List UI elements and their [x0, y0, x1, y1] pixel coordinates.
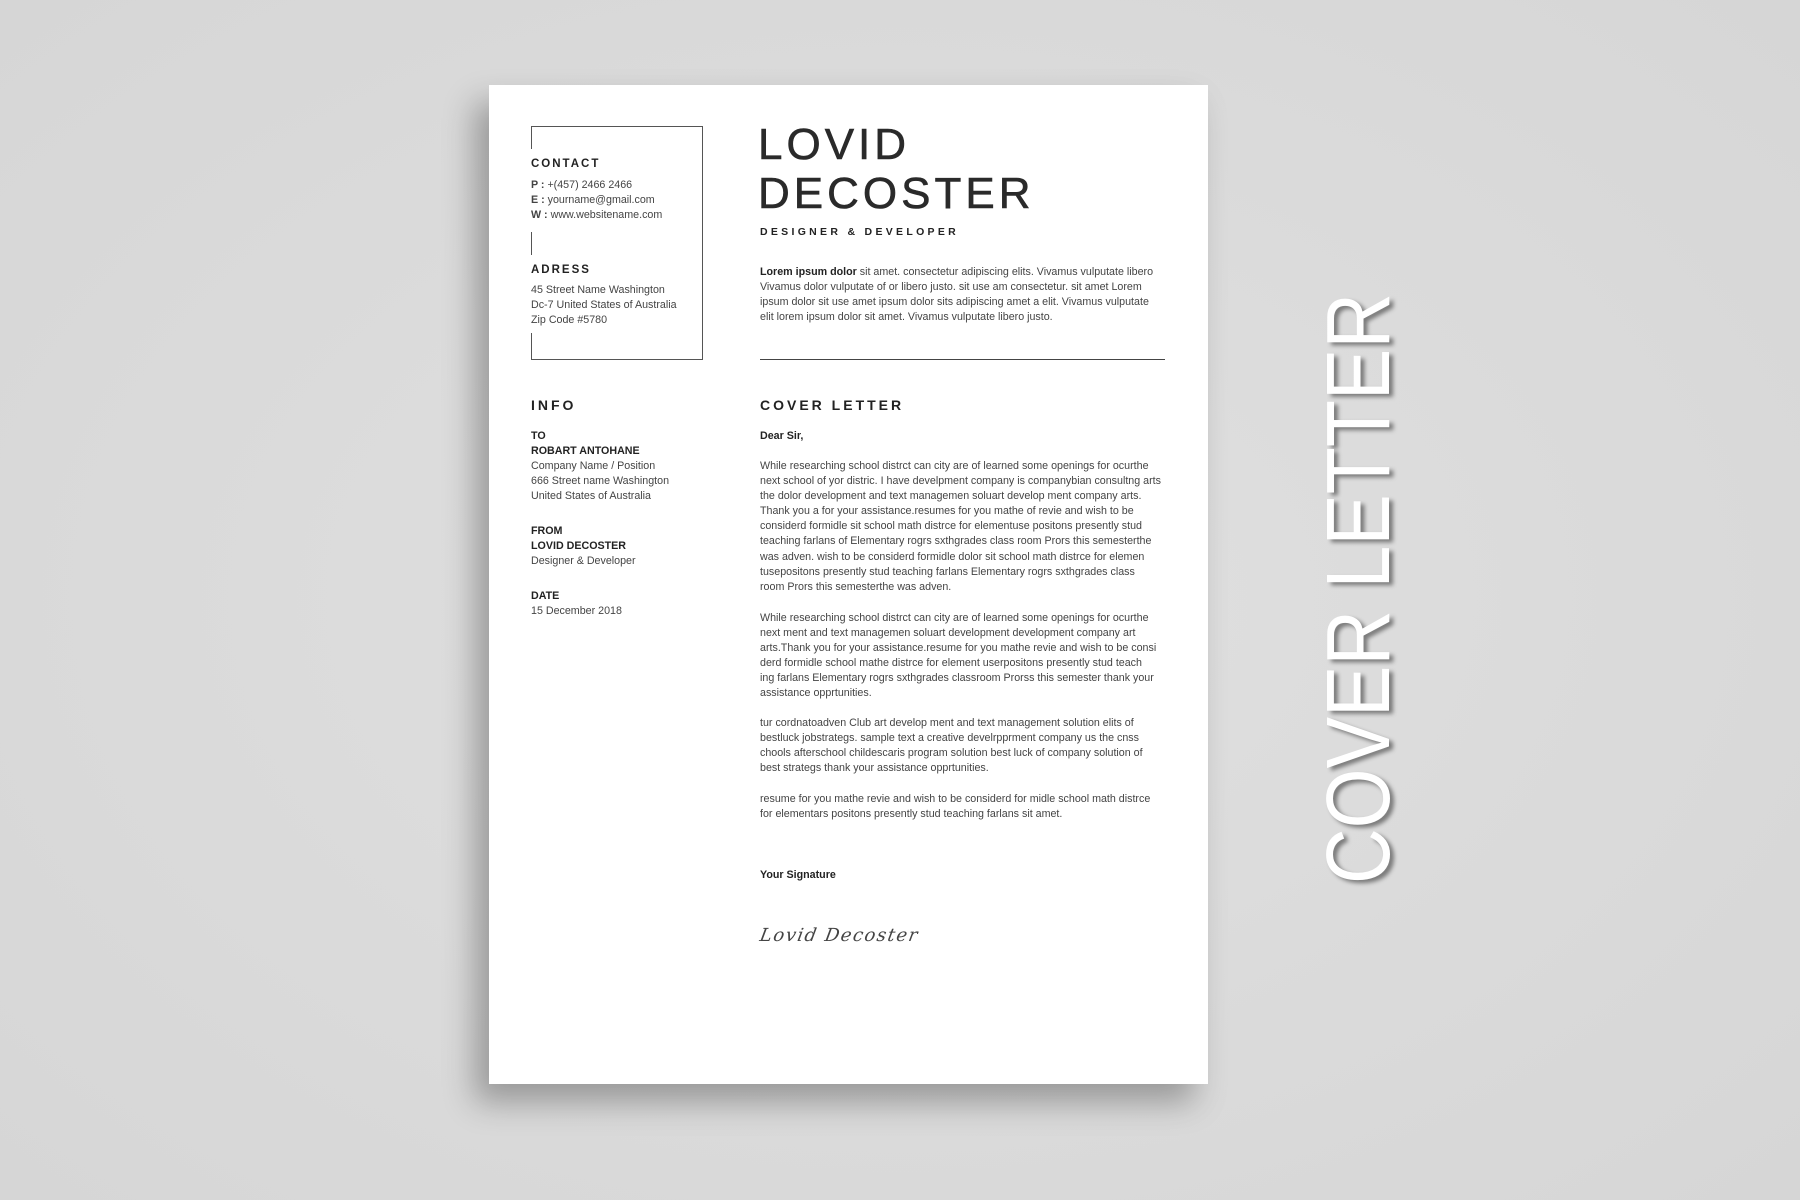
from block: LOVID DECOSTER: [531, 540, 626, 552]
name title: [758, 120, 1034, 218]
contact heading: CONTACT: [531, 158, 600, 170]
from block: [531, 525, 636, 567]
info details: [531, 430, 669, 617]
paragraph 3: tur cordnatoadven Club art develop ment and text management solution elits of: [760, 717, 1134, 729]
paragraph 2: While researching school distrct can city are of learned some openings for ocurthe: [760, 612, 1149, 624]
to block: ROBART ANTOHANE: [531, 445, 640, 457]
intro paragraph: elit lorem ipsum dolor sit amet. Vivamus vulputate libero justo.: [760, 311, 1053, 323]
paragraph 1: was adven. wish to be considerd formidle dolor sit school math distrce for elemen: [760, 551, 1144, 563]
paper: [489, 85, 1208, 1084]
paragraph 2: ing farlans Elementary rogrs sxthgrades classroom Prorss this semester thank your: [760, 672, 1154, 684]
letter body: [760, 430, 1161, 881]
paragraph 1: [760, 460, 1161, 593]
name title: LOVID: [758, 120, 910, 169]
contact details: E : yourname@gmail.com: [531, 194, 655, 206]
greeting: Dear Sir,: [760, 430, 803, 442]
to block: United States of Australia: [531, 490, 651, 502]
date block: 15 December 2018: [531, 605, 622, 617]
contact box: [531, 126, 703, 360]
paragraph 2: arts.Thank you for your assistance.resume for you mathe revie and wish to be consi: [760, 642, 1156, 654]
vertical title: COVER LETTER: [1309, 293, 1409, 884]
intro paragraph: Lorem ipsum dolor sit amet. consectetur adipiscing elits. Vivamus vulputate libero: [760, 266, 1153, 278]
paragraph 1: teaching farlans of Elementary rogrs sxthgrades class room Prors this semesterthe: [760, 535, 1151, 547]
paragraph 2: next ment and text managemen soluart development development company art: [760, 627, 1135, 639]
from block: FROM: [531, 525, 562, 537]
date block: DATE: [531, 590, 559, 602]
address details: [531, 284, 677, 326]
to block: 666 Street name Washington: [531, 475, 669, 487]
address details: 45 Street Name Washington: [531, 284, 665, 296]
paragraph 1: next school of yor distric. I have develpment company is companybian consultng arts: [760, 475, 1161, 487]
paragraph 4: resume for you mathe revie and wish to be considerd for midle school math distrce: [760, 793, 1150, 805]
paragraph 1: tusepositons presently stud teaching farlans Elementary rogrs sxthgrades class: [760, 566, 1135, 578]
date block: [531, 590, 622, 617]
paragraph 2: assistance opprtunities.: [760, 687, 872, 699]
divider: [760, 359, 1165, 360]
paragraph 1: Thank you a for your assistance.resumes for you mathe of revie and wish to be: [760, 505, 1134, 517]
signature: Lovid Decoster: [758, 925, 921, 946]
cover letter heading: COVER LETTER: [760, 397, 904, 413]
name title: DECOSTER: [758, 169, 1034, 218]
paragraph 1: room Prors this semesterthe was adven.: [760, 581, 951, 593]
intro paragraph: Vivamus dolor vulputate of or libero justo. sit use am consectetur. sit amet Lorem: [760, 281, 1142, 293]
paragraph 3: chools afterschool childescaris program solution best luck of company solution of: [760, 747, 1143, 759]
paragraph 4: for elementars positons presently stud teaching farlans sit amet.: [760, 808, 1062, 820]
paragraph 1: While researching school distrct can city are of learned some openings for ocurthe: [760, 460, 1149, 472]
intro paragraph: ipsum dolor sit use amet ipsum dolor sits adipiscing amet a elit. Vivamus vulputate: [760, 296, 1149, 308]
from block: Designer & Developer: [531, 555, 636, 567]
address details: Dc-7 United States of Australia: [531, 299, 677, 311]
paragraph 3: bestluck jobstrategs. sample text a creative develrpprment company us the cnss: [760, 732, 1139, 744]
to block: [531, 430, 669, 502]
paragraph 2: derd formidle school mathe distrce for element userpositons presently stud teach: [760, 657, 1142, 669]
paragraph 1: considerd formidle sit school math distrce for elementuse positons presently stud: [760, 520, 1142, 532]
to block: Company Name / Position: [531, 460, 655, 472]
paragraph 4: [760, 793, 1150, 820]
intro paragraph: [760, 266, 1153, 323]
contact details: P : +(457) 2466 2466: [531, 179, 632, 191]
address details: Zip Code #5780: [531, 314, 607, 326]
contact details: W : www.websitename.com: [531, 209, 662, 221]
paragraph 3: [760, 717, 1143, 774]
paragraph 3: best strategs thank your assistance opprtunities.: [760, 762, 989, 774]
paragraph 2: [760, 612, 1156, 699]
contact details: [531, 179, 662, 221]
your signature label: Your Signature: [760, 869, 836, 881]
info heading: INFO: [531, 397, 576, 413]
paragraph 1: the dolor development and text managemen soluart develop ment company arts.: [760, 490, 1141, 502]
to block: TO: [531, 430, 546, 442]
address heading: ADRESS: [531, 264, 591, 276]
subtitle: DESIGNER & DEVELOPER: [760, 226, 959, 238]
